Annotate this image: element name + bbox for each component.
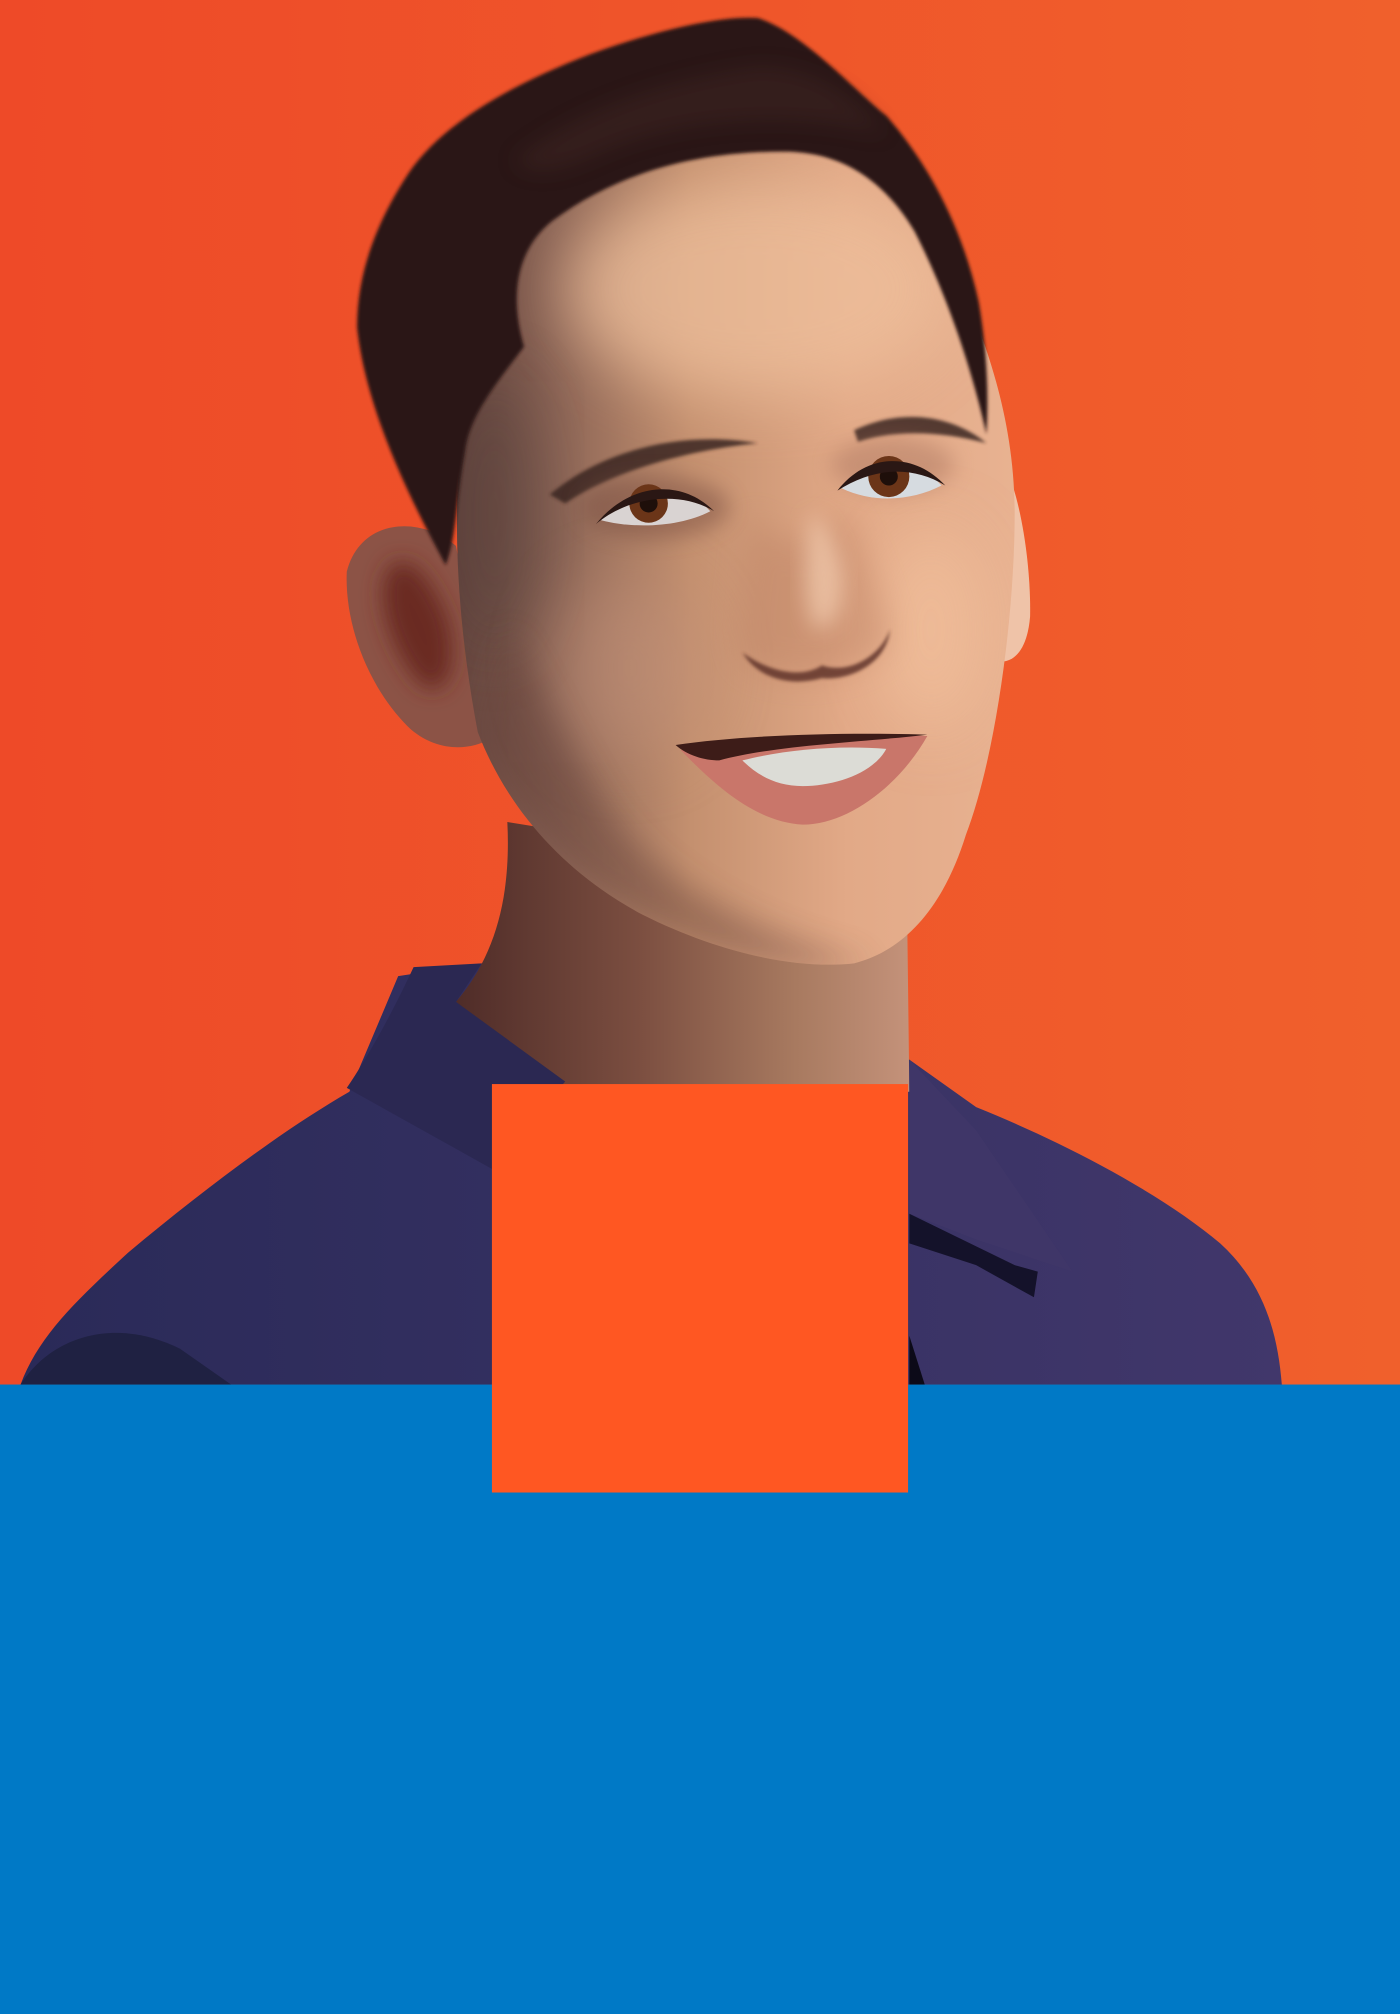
right eye xyxy=(837,456,945,498)
left eye socket xyxy=(581,477,730,538)
right ear xyxy=(986,443,1030,661)
left cheek tone xyxy=(536,588,658,748)
orange background panel xyxy=(0,0,1400,1385)
right brow xyxy=(854,417,986,443)
portrait photo of a man xyxy=(21,18,1282,1385)
hair xyxy=(357,18,987,565)
left ear xyxy=(347,526,491,747)
shirt collar left xyxy=(347,963,565,1169)
orange square xyxy=(492,1084,908,1493)
forehead highlight xyxy=(565,180,950,398)
face xyxy=(457,135,1015,965)
inner ear xyxy=(383,562,452,689)
left brow xyxy=(550,439,758,504)
jaw shadow xyxy=(496,664,858,964)
nose shadow xyxy=(739,507,890,677)
facial shading clipped to the face xyxy=(450,180,985,967)
nose highlight xyxy=(805,514,843,629)
placket shadow xyxy=(909,1336,925,1385)
blue lower panel xyxy=(0,1385,1400,2014)
mouth xyxy=(676,734,927,825)
shirt xyxy=(21,963,1282,1385)
neck xyxy=(456,822,909,1092)
right cheek highlight xyxy=(886,552,968,708)
nose underside xyxy=(742,629,890,682)
hair highlight xyxy=(514,67,886,171)
right eye socket xyxy=(831,437,954,493)
left temple shadow xyxy=(450,372,539,655)
collar shadow xyxy=(909,1214,1038,1297)
left eye xyxy=(596,484,714,525)
shirt collar right xyxy=(909,1060,1072,1272)
sleeve seam xyxy=(21,1333,231,1385)
